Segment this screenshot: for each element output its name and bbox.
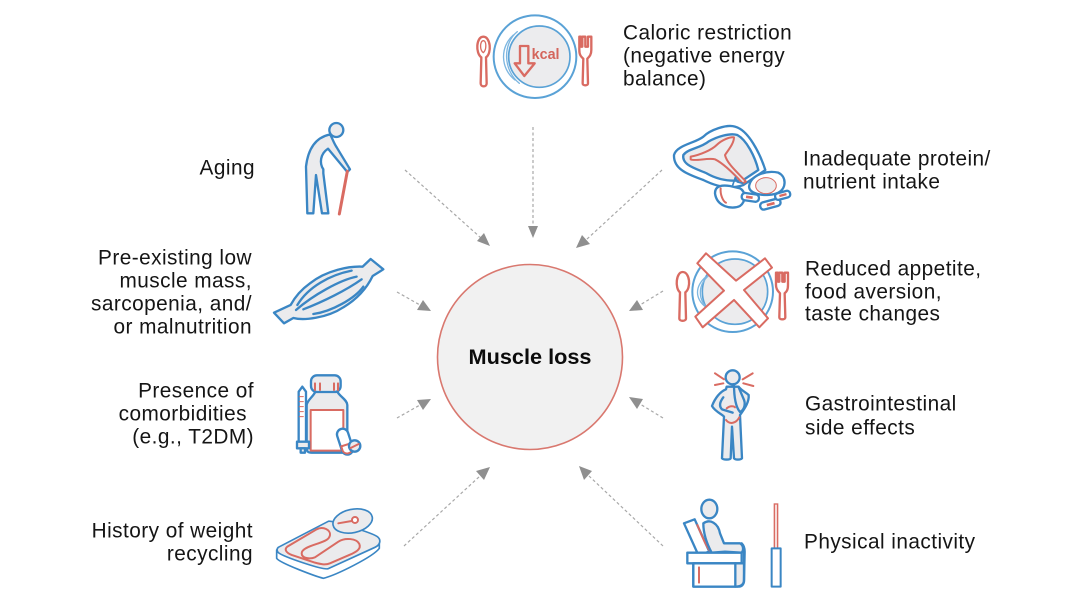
label: comorbidities: Presence of [138,380,254,402]
icon: elderly person with cane [306,123,350,214]
label: pre-existing low muscle mass: Pre-existing low [98,246,252,270]
icon: plate with kcal and down arrow: kcal [532,47,560,63]
label: gastrointestinal side effects: Gastrointestinal [805,392,957,416]
icon: person sitting, inactivity [684,500,781,587]
central circle: muscle loss [438,264,622,450]
label: pre-existing low muscle mass: muscle mass, [119,270,252,292]
icon: crossed out plate [677,251,788,332]
label: aging: Aging [200,156,255,180]
arrow: gastrointestinal effects to muscle loss [629,397,663,418]
central circle: muscle loss: Muscle loss [469,344,591,369]
arrow: physical inactivity to muscle loss [579,466,663,546]
label: history of weight recycling: recycling [167,542,253,566]
icon: weighing scale [277,505,380,578]
label: caloric restriction: Caloric restriction [623,22,792,44]
label: history of weight recycling: History of weight [92,520,253,542]
label: pre-existing low muscle mass: sarcopenia, and/ [91,292,252,316]
arrow: low muscle mass to muscle loss [397,292,431,311]
icon: plate with kcal and down arrow [477,15,591,98]
label: caloric restriction: (negative energy [623,44,785,68]
arrow: weight recycling to muscle loss [404,467,490,546]
label: inadequate protein: Inadequate protein/ [803,148,991,170]
label: physical inactivity: Physical inactivity [804,530,976,554]
arrow: protein intake to muscle loss [576,170,662,248]
arrow: caloric restriction to muscle loss [528,127,538,238]
arrow: aging to muscle loss [405,170,490,246]
label: comorbidities: (e.g., T2DM) [132,426,254,448]
arrow: reduced appetite to muscle loss [629,291,663,311]
label: comorbidities: comorbidities [119,402,247,426]
label: caloric restriction: balance) [623,68,706,90]
icon: medication bottle, syringe and pills [297,375,360,456]
label: reduced appetite: taste changes [805,302,940,326]
icon: person with stomach pain [712,370,753,460]
icon: steak and bones [674,126,791,210]
label: gastrointestinal side effects: side effects [805,416,915,440]
arrow: comorbidities to muscle loss [397,399,431,418]
label: pre-existing low muscle mass: or malnutrition [113,316,252,338]
icon: muscle [274,259,383,323]
label: reduced appetite: Reduced appetite, [805,258,981,280]
label: inadequate protein: nutrient intake [803,170,940,194]
label: reduced appetite: food aversion, [805,280,942,304]
